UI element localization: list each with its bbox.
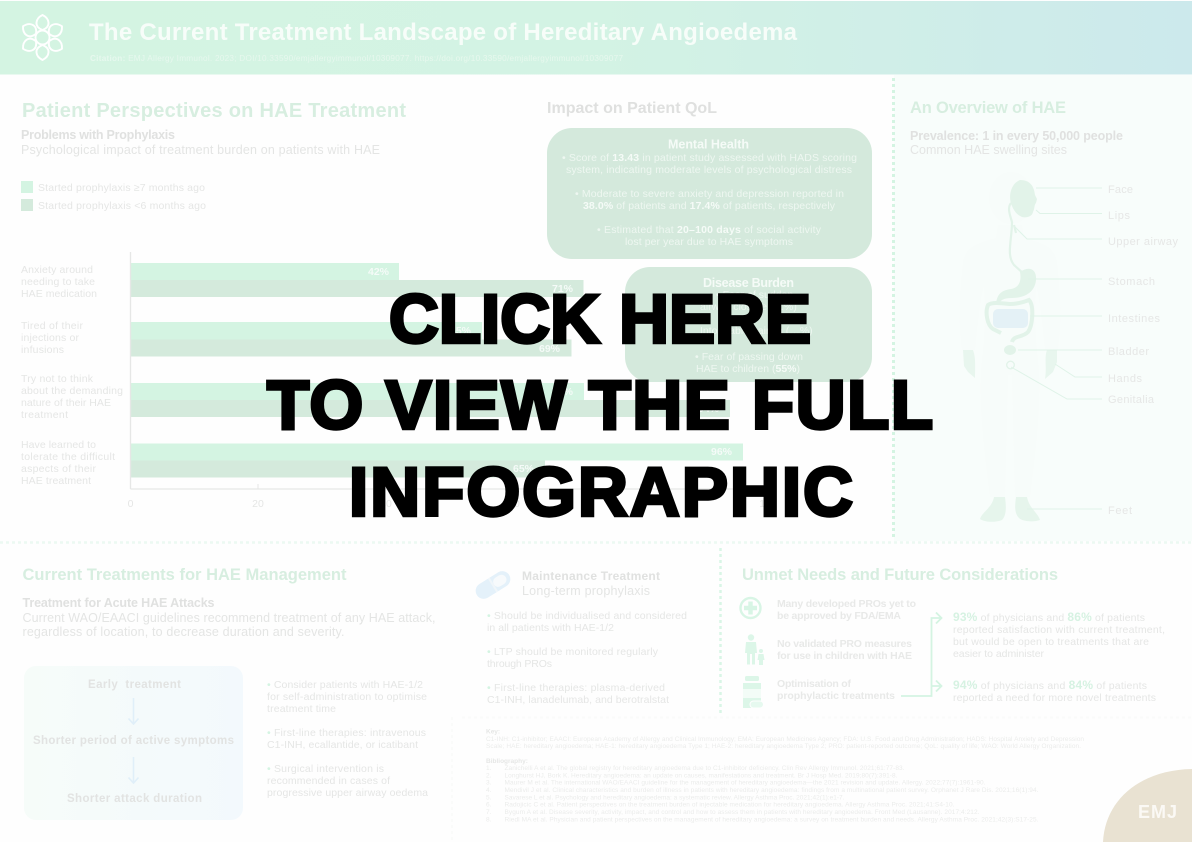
chart row labels: HAE medication xyxy=(21,288,97,300)
text: children: No validated PRO measures xyxy=(777,638,912,650)
organ: oesophagus and airway xyxy=(1009,203,1024,274)
call to action overlay: CLICK HERE xyxy=(389,280,811,358)
site labels: Feet xyxy=(1108,505,1132,517)
chart row labels: Anxiety around xyxy=(21,264,93,276)
chart row labels: treatment xyxy=(21,409,68,421)
key and bibliography: 8. xyxy=(486,816,492,823)
text: acute treatment bullets: • Consider patients with HAE-1/2 xyxy=(267,679,423,691)
text: novel treatments statistic xyxy=(953,678,1156,704)
chart row labels: Tired of their xyxy=(21,320,84,332)
text: maintenance bullets xyxy=(487,610,687,706)
text: PROs xyxy=(777,598,916,622)
icon: parent and child xyxy=(745,634,764,665)
site labels: Intestines xyxy=(1108,313,1160,325)
site labels: Lips xyxy=(1108,210,1130,222)
organ: genitalia xyxy=(1007,361,1014,369)
header banner xyxy=(0,1,1192,74)
icon: medical cross xyxy=(740,598,760,618)
chart row labels xyxy=(21,264,123,487)
key and bibliography: Riedl MA et al. Physician and patient perspectives on the management of hereditary angioedema: a survey on treatment burden and needs. Allergy Asthma Proc. 2021;42(3):S17-25. xyxy=(504,816,1039,823)
key and bibliography: 1. xyxy=(486,765,492,772)
flow box: early treatment: Shorter period of active symptoms xyxy=(33,735,234,747)
text: acute treatment bullets: C1-INH, ecallantide, or icatibant xyxy=(267,739,418,751)
text: chart description: Psychological impact of treatment burden on patients with HAE xyxy=(21,143,380,157)
chart row labels: HAE treatment xyxy=(21,475,91,487)
bar value labels: 96% xyxy=(711,446,733,458)
bar value labels: 42% xyxy=(368,266,390,278)
text: maintenance bullets: C1-INH, lanadelumab, and berotralstat xyxy=(487,694,669,706)
text: guideline recommendation: regardless of location, to decrease duration and severity. xyxy=(22,625,344,639)
card: disease burden: Intolerable pain in (…%) xyxy=(700,325,813,337)
call to action overlay xyxy=(267,280,933,530)
text: guideline recommendation: Current WAO/EAACI guidelines recommend treatment of any HAE attack, xyxy=(22,611,436,625)
heading: maintenance treatment: Maintenance Treatment xyxy=(522,569,660,583)
bar value labels: 71% xyxy=(552,283,574,295)
flow box: early treatment: Early treatment xyxy=(88,679,181,691)
text: acute treatment bullets: for self-administration to optimise xyxy=(267,691,427,703)
subheading: long-term prophylaxis: Long-term prophylaxis xyxy=(522,584,650,598)
chart row labels: injections or xyxy=(21,332,80,344)
heading: patient perspectives: Patient Perspectives on HAE Treatment xyxy=(22,100,406,122)
chart row labels: about the demanding xyxy=(21,385,123,397)
chart row labels: Try not to think xyxy=(21,373,94,385)
EMJ logo corner: EMJ xyxy=(1138,802,1177,822)
key and bibliography: Zanichelli A et al. The global registry for hereditary angioedema due to C1-inhibitor deficiency. Clin Rev Allergy Immunol. 2021;61:77-83. xyxy=(504,765,905,772)
panel: patient perspectives xyxy=(21,100,777,510)
key and bibliography: Maurer M et al. The international WAO/EAACI guideline for the management of hereditary angioedema—the 2021 revision and update. Allergy. 2022;77(7):1961-90. xyxy=(504,780,986,787)
text: maintenance bullets: • First-line therapies: plasma-derived xyxy=(487,682,665,694)
bar value labels: 71% xyxy=(552,386,574,398)
legend: Started prophylaxis <6 months ago xyxy=(38,200,206,212)
text: acute treatment bullets: recommended in cases of xyxy=(267,775,390,787)
panel: maintenance treatment xyxy=(473,568,687,706)
text: swelling sites: Common HAE swelling sites xyxy=(910,143,1067,157)
chart row labels: aspects of their xyxy=(21,463,96,475)
bar value labels xyxy=(368,266,733,475)
bars xyxy=(130,263,743,478)
panel: impact on patient QoL xyxy=(547,100,872,382)
key and bibliography: Longhurst HJ, Bork K. Hereditary angioedema: an update on causes, manifestations and treatment. Br J Hosp Med. 2019;80(7):391-8. xyxy=(504,772,898,779)
heading: unmet needs: Unmet Needs and Future Considerations xyxy=(742,566,1058,584)
text: maintenance bullets: in all patients with HAE-1/2 xyxy=(487,622,614,634)
icon: pill capsule xyxy=(473,568,513,602)
call to action overlay: INFOGRAPHIC xyxy=(349,454,853,530)
key and bibliography: C1-INH: C1-inhibitor; EAACI: European Academy of Allergy and Clinical Immunology; EMA: European Medicines Agency; FDA: U.S. Food and Drug Administration; HADS: Hospital Anxiety and Depression xyxy=(486,736,1084,743)
text: satisfaction statistic: easier to administer xyxy=(953,648,1044,660)
panel: unmet needs xyxy=(740,566,1165,708)
call to action overlay: TO VIEW THE FULL xyxy=(267,366,933,444)
card: disease burden: airway closure (…%) xyxy=(700,301,797,313)
card: mental health: • Score of 13.43 in patient study assessed with HADS scoring xyxy=(562,152,857,164)
legend xyxy=(21,181,206,212)
text: acute treatment bullets: treatment time xyxy=(267,703,336,715)
panel: current treatments xyxy=(22,566,436,820)
card: mental health: • Moderate to severe anxiety and depression reported in xyxy=(575,188,844,200)
key and bibliography: 7. xyxy=(486,809,492,816)
card: disease burden: • Fear of sudden xyxy=(716,289,793,301)
chart row labels: tolerate the difficult xyxy=(21,451,115,463)
key and bibliography: Bygum A et al. Disease severity, activity, impact, and control and how to assess them in patients with hereditary angioedema. Front Med (Lausanne). 2017;4:212. xyxy=(504,809,980,816)
text: prevalence: Prevalence: 1 in every 50,000 people xyxy=(910,129,1123,143)
card: disease burden: • Fear of passing down xyxy=(695,351,803,363)
key and bibliography: Bibliography: xyxy=(486,758,528,765)
text: optimisation xyxy=(777,678,895,702)
card: disease burden: Disease Burden xyxy=(703,276,794,290)
chart axes: 80 xyxy=(635,498,647,510)
text: PROs: be approved by FDA/EMA xyxy=(777,610,901,622)
legend: Started prophylaxis ≥7 months ago xyxy=(38,182,205,194)
organ: bladder xyxy=(1004,345,1016,355)
chart axes: 20 xyxy=(252,498,264,510)
card: mental health: 38.0% of patients and 17.4% of patients, respectively xyxy=(583,200,836,212)
flow box: early treatment: Shorter attack duration xyxy=(67,793,202,805)
chart row labels: Have learned to xyxy=(21,439,96,451)
chart axes: 100 xyxy=(759,498,777,510)
chart axes: 60 xyxy=(508,498,520,510)
chart axes xyxy=(128,252,777,510)
site labels: Face xyxy=(1108,184,1133,196)
flow box: early treatment xyxy=(24,666,243,820)
key and bibliography: Savarese L et al. Psychology and hereditary angioedema: a systematic review. Allergy Asthma Proc. 2021;42(1):e1-7. xyxy=(504,794,845,801)
figure: human body with organs xyxy=(960,172,1060,522)
site labels: Genitalia xyxy=(1108,394,1155,406)
card: mental health xyxy=(547,128,872,259)
card: mental health: Mental Health xyxy=(668,138,749,152)
card: mental health: system, indicating moderate levels of psychological distress xyxy=(566,164,852,176)
key and bibliography xyxy=(486,728,1084,823)
organ: stomach xyxy=(996,269,1036,305)
chart axes: 40 xyxy=(380,498,392,510)
citation: Citation: EMJ Allergy Immunol. 2023; DOI/10.33590/emjallergyimmunol/10309077. https://doi.org/10.33590/emjallergyimmunol/10309077 xyxy=(90,54,623,63)
chart row labels: needing to take xyxy=(21,276,95,288)
site labels: Stomach xyxy=(1108,276,1155,288)
heading: overview: An Overview of HAE xyxy=(910,99,1066,117)
key and bibliography: 6. xyxy=(486,802,492,809)
bar value labels: 94% xyxy=(698,403,720,415)
panel: overview of HAE xyxy=(910,99,1178,522)
organ: feet xyxy=(980,497,1040,522)
key and bibliography: Key: xyxy=(486,728,500,736)
subheading: problems with prophylaxis: Problems with Prophylaxis xyxy=(21,128,175,142)
organ: small intestine xyxy=(993,309,1028,328)
site labels: Upper airway xyxy=(1108,236,1178,248)
text: PROs: Many developed PROs yet to xyxy=(777,598,916,610)
title: The Current Treatment Landscape of Hereditary Angioedema xyxy=(89,19,798,46)
key and bibliography: Mendivil J et al. Clinical characteristics and burden of illness in patients with hereditary angioedema: findings from a multinational patient survey. Orphanet J Rare Dis. 2021;16(1):94. xyxy=(504,787,1039,794)
key and bibliography: 2. xyxy=(486,772,492,779)
icon: pill bottle xyxy=(743,676,764,708)
text: satisfaction statistic: but would be open to treatments that are xyxy=(953,636,1149,648)
text: maintenance bullets: through PROs xyxy=(487,658,552,670)
key and bibliography: 3. xyxy=(486,780,492,787)
arrow xyxy=(128,757,138,783)
site labels: Bladder xyxy=(1108,346,1149,358)
chart row labels: nature of their HAE xyxy=(21,397,111,409)
text: novel treatments statistic: reported a need for more novel treatments xyxy=(953,692,1156,704)
organ: face xyxy=(1010,180,1037,217)
heading: impact on QoL: Impact on Patient QoL xyxy=(547,100,717,117)
text: children xyxy=(777,638,912,662)
leader lines xyxy=(1011,188,1102,509)
site labels xyxy=(1108,184,1178,517)
text: maintenance bullets: • Should be individualised and considered xyxy=(487,610,687,622)
chart row labels: infusions xyxy=(21,344,64,356)
site labels: Hands xyxy=(1108,373,1142,385)
chart axes: 0 xyxy=(128,498,134,510)
bar value labels: 69% xyxy=(539,343,561,355)
organ: large intestine xyxy=(987,300,1032,342)
text: novel treatments statistic: 94% of physicians and 84% of patients xyxy=(953,678,1147,692)
text: acute treatment bullets: • First-line therapies: intravenous xyxy=(267,727,426,739)
text: acute treatment bullets xyxy=(267,679,428,799)
text: guideline recommendation xyxy=(22,611,436,639)
panel: overview background xyxy=(894,75,1192,541)
card: disease burden: HAE to children (55%) xyxy=(696,363,800,375)
bar chart xyxy=(21,252,777,510)
arrow: connector to outcomes xyxy=(901,612,942,696)
text: acute treatment bullets: progressive upper airway oedema xyxy=(267,787,428,799)
text: acute treatment bullets: • Surgical intervention is xyxy=(267,763,384,775)
EMJ logo corner xyxy=(1103,769,1192,842)
key and bibliography: Scale; HAE: hereditary angioedema; HAE-1: hereditary angioedema Type 1; HAE-2: hereditary angioedema Type 2; PRO: patient-reported outcome; QoL: quality of life; WAO: World Allergy Organization. xyxy=(486,743,1081,750)
card: mental health: lost per year due to HAE symptoms xyxy=(625,236,793,248)
bar value labels: 65% xyxy=(513,463,535,475)
heading: current treatments: Current Treatments for HAE Management xyxy=(22,566,347,584)
key and bibliography: 5. xyxy=(486,794,492,801)
bar value labels: 55% xyxy=(450,325,472,337)
icon: flower logo xyxy=(20,15,65,60)
arrow xyxy=(128,698,138,724)
card: disease burden xyxy=(625,267,872,382)
key and bibliography: Radojicic C et al. Patient perspectives on the treatment burden of injectable medication for hereditary angioedema. Allergy Asthma Proc. 2021;41:S4-10. xyxy=(504,802,955,809)
text: optimisation: prophylactic treatments xyxy=(777,690,895,702)
text: optimisation: Optimisation of xyxy=(777,678,852,690)
text: children: for use in children with HAE xyxy=(777,650,912,662)
text: satisfaction statistic xyxy=(953,610,1165,660)
card: mental health: • Estimated that 20–100 days of social activity xyxy=(597,224,822,236)
key and bibliography: 4. xyxy=(486,787,492,794)
text: maintenance bullets: • LTP should be monitored regularly xyxy=(487,646,659,658)
text: satisfaction statistic: reported satisfaction with current treatment, xyxy=(953,624,1165,636)
subheading: acute attacks: Treatment for Acute HAE Attacks xyxy=(22,596,215,610)
organ: hands xyxy=(963,350,1057,379)
text: satisfaction statistic: 93% of physicians and 86% of patients xyxy=(953,610,1145,624)
